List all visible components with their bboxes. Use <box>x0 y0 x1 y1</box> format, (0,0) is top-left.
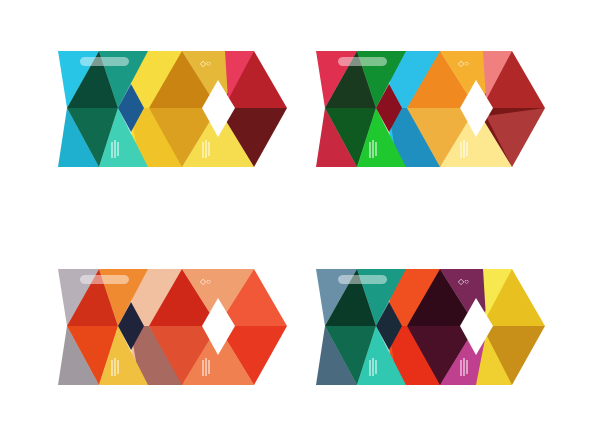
infographic group 4: slate green red purple yellow <box>316 269 545 385</box>
left hexagon <box>67 51 118 108</box>
infographic group 3: grey red orange <box>58 269 287 385</box>
icons: ◇○ <box>200 59 211 68</box>
label pill <box>80 57 129 66</box>
right hexagon <box>149 51 218 108</box>
infographic group 4: slate green red purple yellow: ◇○ <box>458 277 469 286</box>
small diamond <box>118 84 144 132</box>
infographic group 1: cyan green yellow red <box>58 51 287 167</box>
white diamond <box>202 80 235 137</box>
side triangles <box>58 51 99 108</box>
infographic group 2: red green cyan orange: ◇○ <box>458 59 469 68</box>
infographic group 3: grey red orange: ◇○ <box>200 277 211 286</box>
middle column <box>125 51 185 167</box>
infographic group 2: red green cyan orange <box>316 51 545 167</box>
